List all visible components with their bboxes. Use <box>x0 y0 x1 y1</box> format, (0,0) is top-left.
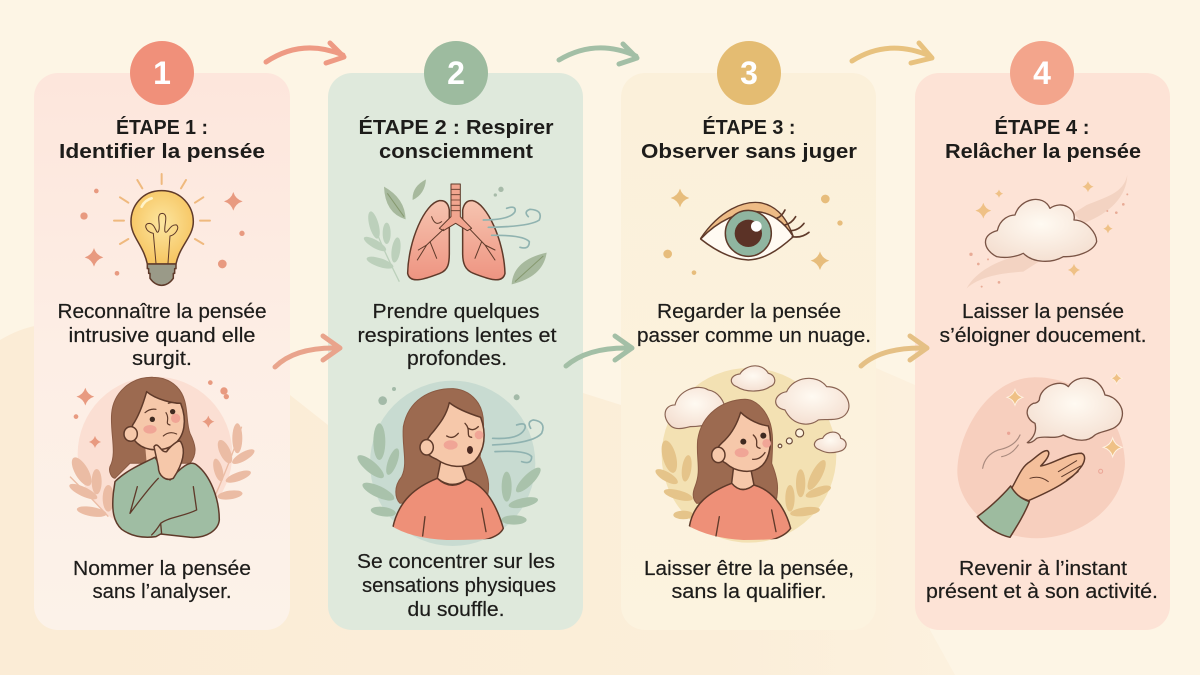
text: drift away <box>940 301 1146 347</box>
text: sensations: sensations physiques <box>362 575 556 597</box>
text: watch: passer comme un nuage. <box>637 325 871 347</box>
card 2 <box>328 73 583 630</box>
number badge 3: 3 <box>740 55 758 91</box>
text: name the thought: Nommer la pensée <box>73 558 251 580</box>
number badge 1: 1 <box>153 55 171 91</box>
heading 3: ÉTAPE 3 : <box>702 116 796 139</box>
illustration: breathing woman <box>354 381 544 546</box>
text: recognise: intrusive quand elle <box>68 325 256 347</box>
heading 4 <box>945 116 1141 163</box>
heading 2: ÉTAPE 2 : Respirer <box>358 116 554 139</box>
text: let be <box>644 558 854 603</box>
text: let be: sans la qualifier. <box>672 581 826 603</box>
panel: step 1 <box>34 41 290 630</box>
text: breathe <box>358 301 557 370</box>
text: recognise <box>58 301 266 370</box>
text: watch <box>637 301 871 347</box>
illustration: thinking woman <box>67 377 256 537</box>
heading 2 <box>358 116 554 163</box>
text: drift away: s’éloigner doucement. <box>940 325 1146 347</box>
panel: step 2 <box>328 41 583 630</box>
heading 4: ÉTAPE 4 : <box>994 116 1090 139</box>
text: breathe: Prendre quelques <box>372 301 540 323</box>
card 1 <box>34 73 290 630</box>
illustration: woman watching clouds <box>653 366 849 543</box>
heading 3: Observer sans juger <box>641 140 857 163</box>
text: name the thought <box>73 558 251 603</box>
icon: drifting cloud <box>967 175 1128 288</box>
panel: step 3 <box>621 41 876 630</box>
number badge 2 <box>424 41 488 105</box>
icon: lightbulb <box>80 174 245 285</box>
arrow: step 3 to 4 top <box>852 43 932 63</box>
illustration: hand releasing cloud <box>957 373 1125 538</box>
heading 1 <box>59 116 265 163</box>
arrow: step 3 to 4 middle <box>861 336 927 366</box>
number badge 4 <box>1010 41 1074 105</box>
arrow: step 1 to 2 middle <box>275 336 340 367</box>
card 3 <box>621 73 876 630</box>
number badge 2: 2 <box>447 55 465 91</box>
text: sensations: Se concentrer sur les <box>357 551 555 573</box>
text: return: Revenir à l’instant <box>959 558 1127 580</box>
text: watch: Regarder la pensée <box>657 301 841 323</box>
heading 4: Relâcher la pensée <box>945 140 1141 163</box>
text: recognise: surgit. <box>132 348 192 370</box>
text: recognise: Reconnaître la pensée <box>58 301 266 323</box>
icon: lungs <box>362 179 547 284</box>
text: return: présent et à son activité. <box>926 581 1158 603</box>
heading 1: ÉTAPE 1 : <box>116 116 208 139</box>
text: drift away: Laisser la pensée <box>962 301 1124 323</box>
text: return <box>926 558 1158 603</box>
number badge 4: 4 <box>1033 55 1051 91</box>
text: breathe: profondes. <box>407 348 507 370</box>
arrow: step 2 to 3 top <box>559 44 637 64</box>
icon: eye <box>663 189 843 275</box>
card 4 <box>915 73 1170 630</box>
heading 3 <box>641 116 857 163</box>
number badge 1 <box>130 41 194 105</box>
arrow: step 1 to 2 top <box>266 43 344 63</box>
text: let be: Laisser être la pensée, <box>644 558 854 580</box>
arrow: step 2 to 3 middle <box>566 336 632 366</box>
text: sensations <box>357 551 556 621</box>
number badge 3 <box>717 41 781 105</box>
text: breathe: respirations lentes et <box>358 325 557 347</box>
heading 1: Identifier la pensée <box>59 140 265 163</box>
text: sensations: du souffle. <box>408 599 504 621</box>
heading 2: consciemment <box>379 140 533 163</box>
text: name the thought: sans l’analyser. <box>92 581 232 603</box>
panel: step 4 <box>915 41 1170 630</box>
